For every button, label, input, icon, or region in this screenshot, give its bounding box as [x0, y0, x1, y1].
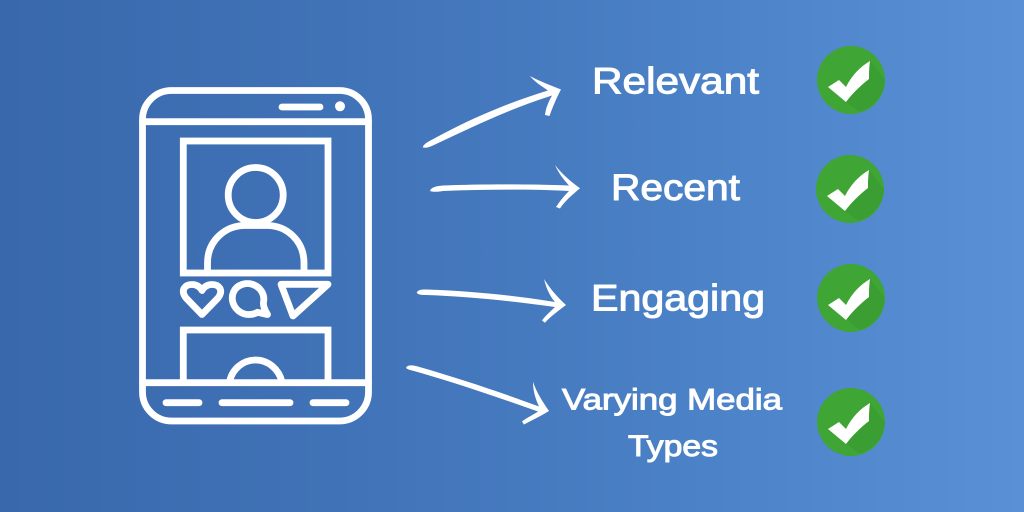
icon: green check 1 [817, 46, 885, 114]
icon: green check 2 [816, 155, 884, 223]
photo post frame [183, 141, 328, 273]
phone header bar [142, 101, 368, 122]
second post frame [183, 330, 328, 382]
icon: share arrow [281, 284, 328, 316]
label: Varying Media Types [562, 383, 782, 463]
label: Relevant: Relevant [592, 60, 760, 101]
label: Recent: Recent [611, 167, 741, 208]
icon: heart [183, 284, 221, 314]
icon: green check 4 [817, 388, 885, 456]
arrow to Varying Media Types [406, 365, 549, 424]
label: Engaging: Engaging [591, 278, 765, 319]
arrow to Relevant [423, 76, 561, 148]
phone footer bar [142, 383, 368, 403]
icon: phone with social feed [142, 90, 368, 421]
arrow to Engaging [417, 279, 566, 323]
arrow to Recent [430, 165, 580, 208]
label: Varying Media Types: Varying Media [562, 383, 782, 416]
second post avatar [230, 360, 282, 382]
icon: green check 3 [817, 264, 885, 332]
phone body [142, 90, 368, 421]
icon: comment bubble [232, 284, 268, 315]
label: Varying Media Types: Types [628, 430, 718, 463]
person avatar [208, 168, 304, 273]
